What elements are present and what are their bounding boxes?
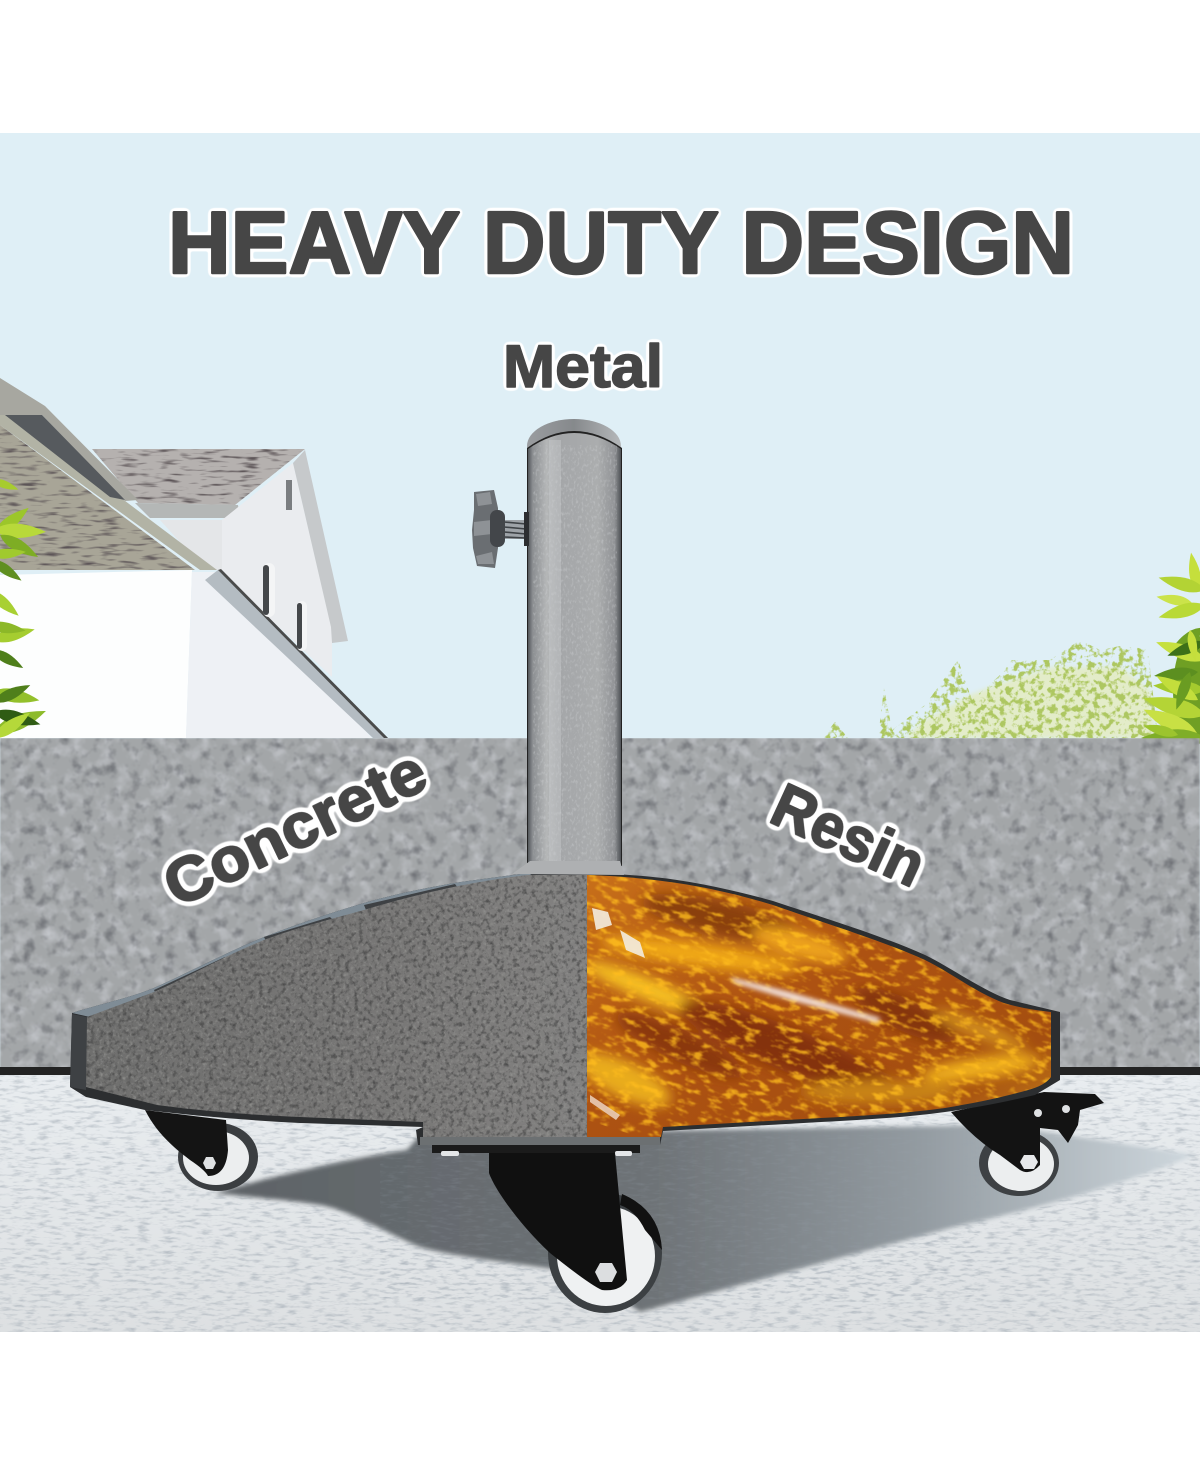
- concrete section: [86, 875, 587, 1137]
- right foliage: [1140, 552, 1200, 747]
- base shadow: [214, 1125, 1195, 1312]
- ground: [0, 1067, 1200, 1332]
- label: metal: Metal: [503, 333, 663, 400]
- left foliage: [0, 476, 49, 743]
- concrete wall: [0, 738, 1200, 1068]
- tightening knob: [472, 490, 529, 568]
- title: HEAVY DUTY DESIGN: [168, 193, 1074, 292]
- background shrubs: [824, 642, 1156, 738]
- metal pole: [512, 419, 624, 875]
- label: resin: Resin: [761, 771, 935, 901]
- resin section: [587, 875, 1051, 1137]
- left caster: [145, 1110, 258, 1191]
- right caster with brake: [951, 1092, 1104, 1196]
- house: [0, 378, 388, 738]
- label: concrete: Concrete: [153, 737, 437, 921]
- outer shell: [70, 873, 1060, 1145]
- front caster: [432, 1145, 662, 1313]
- umbrella base: [70, 874, 1060, 1145]
